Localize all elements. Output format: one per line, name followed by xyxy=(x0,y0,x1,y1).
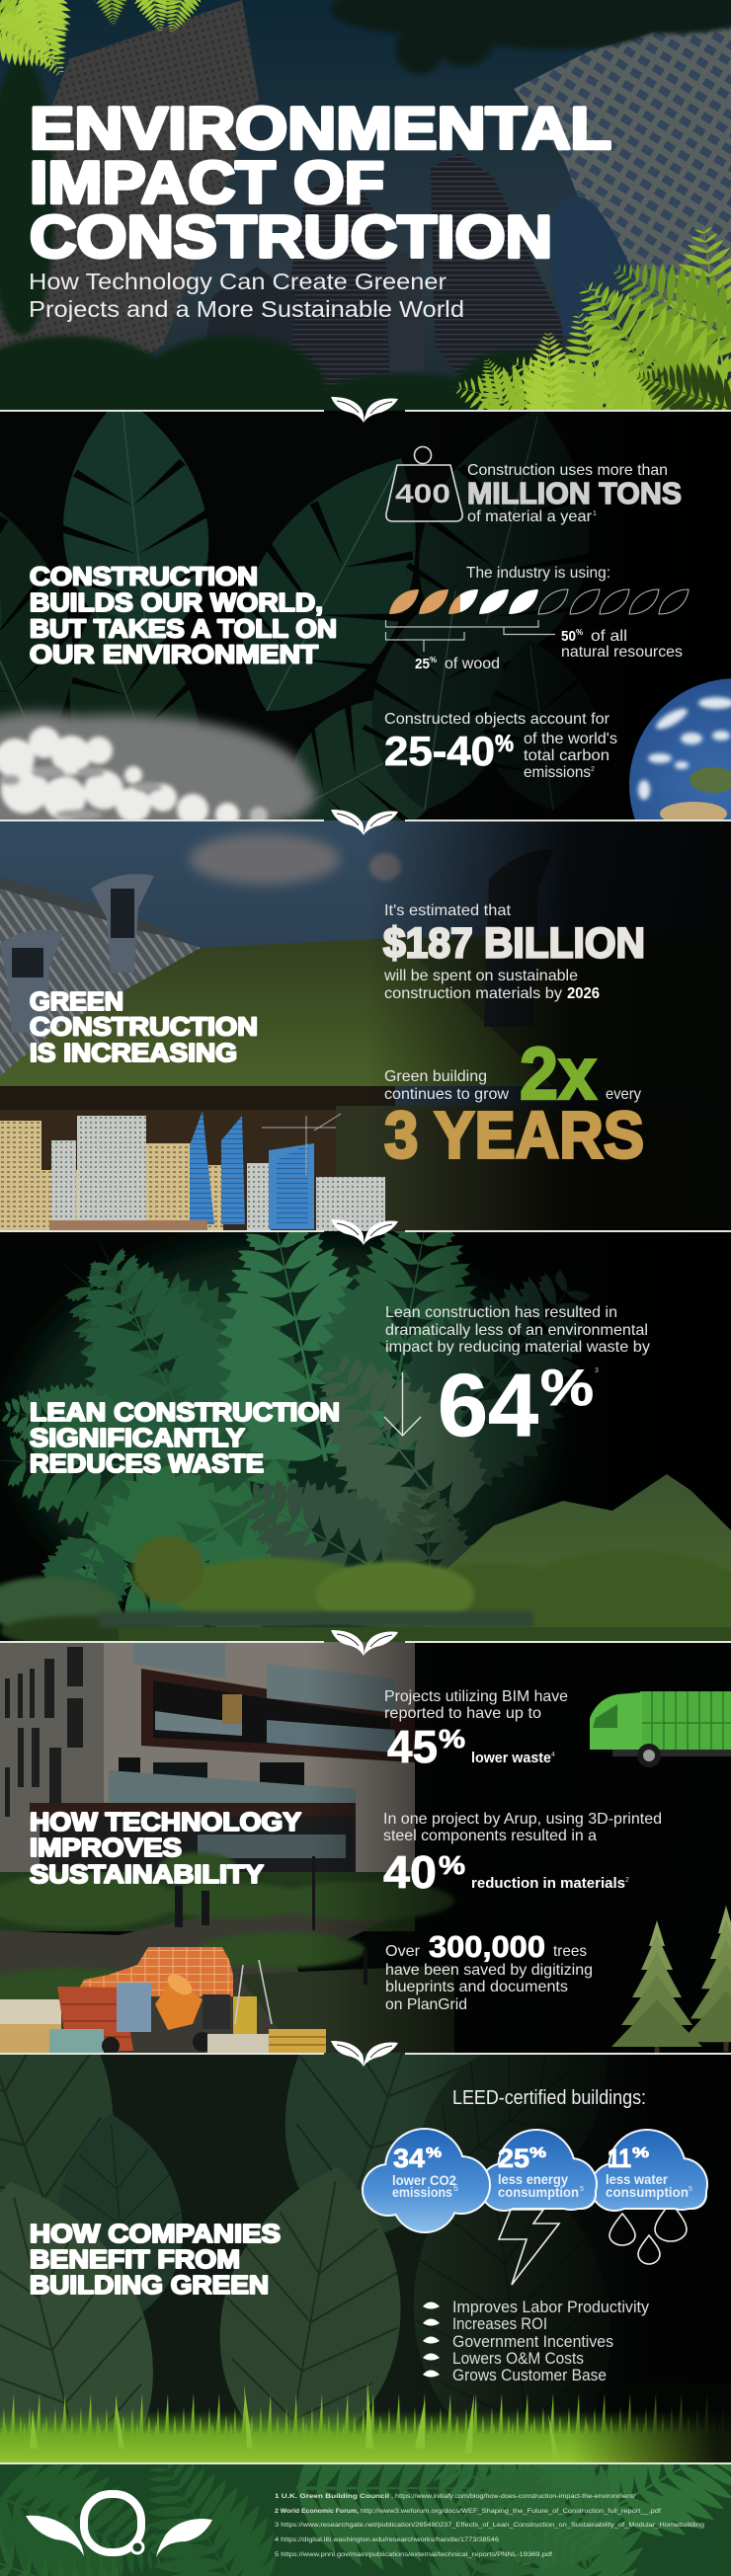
stat: BIM 45%: reported to have up to xyxy=(384,1705,541,1722)
subtitle: How Technology Can Create Greener xyxy=(29,269,447,294)
heading: IMPROVES xyxy=(30,1834,182,1862)
text: lean construction: dramatically less of an environmental xyxy=(385,1322,648,1339)
stat: 187 billion: 2026 xyxy=(567,985,600,1002)
cloud: water 11%: 5 xyxy=(689,2186,692,2193)
subtitle xyxy=(29,269,464,322)
photo: city skyline from below xyxy=(0,0,731,411)
stat: Arup 40% xyxy=(383,1813,661,1889)
stat: Arup 40%: % xyxy=(439,1850,465,1880)
skyline xyxy=(0,1111,385,1231)
heading: IS INCREASING xyxy=(30,1040,237,1067)
stat: 187 billion: It's estimated that xyxy=(384,902,512,919)
list: benefits: Increases ROI xyxy=(452,2314,547,2333)
icon: lightning xyxy=(499,2210,559,2285)
label: 50% of natural resources: % xyxy=(576,628,583,637)
heading: OUR ENVIRONMENT xyxy=(30,642,318,669)
sources xyxy=(275,2493,704,2558)
stat: 187 billion: $187 BILLION xyxy=(383,920,645,968)
pictogram: ten leaves xyxy=(389,589,689,614)
title: CONSTRUCTION xyxy=(30,203,552,271)
stat: 64% xyxy=(441,1367,599,1438)
sources: 3 https://www.researchgate.net/publication/265480237_Effects_of_Lean_Construction_on_Sustainability_of_Modular_Homebuilding xyxy=(275,2522,704,2529)
stat: 300,000 trees: on PlanGrid xyxy=(385,1996,467,2013)
heading: SUSTAINABILITY xyxy=(30,1861,264,1889)
heading: BUT TAKES A TOLL ON xyxy=(30,616,337,644)
stat: 2x every 3 years: Green building xyxy=(384,1068,487,1085)
stat: 64%: 64 xyxy=(438,1357,538,1455)
sources: , https://www.initiafy.com/blog/how-does-construction-impact-the-environment/ xyxy=(391,2493,635,2500)
icon: divider leaves xyxy=(331,397,398,2067)
cloud: CO2 34%: 34 xyxy=(393,2144,425,2173)
cloud: CO2 34%: 5 xyxy=(453,2183,458,2193)
stat: BIM 45% xyxy=(385,1690,567,1763)
cloud: CO2 34%: lower CO2 xyxy=(392,2172,456,2188)
list: benefits: Grows Customer Base xyxy=(452,2366,607,2384)
stat: BIM 45%: 45 xyxy=(387,1721,438,1772)
cloud: energy 25%: 5 xyxy=(580,2186,584,2193)
icon: fern bottom right xyxy=(450,217,731,410)
stat: carbon emissions: % xyxy=(495,731,514,757)
stat: million tons: 1 xyxy=(593,510,597,517)
stat: Arup 40%: 2 xyxy=(625,1877,629,1884)
stat: Arup 40%: steel components resulted in a xyxy=(383,1828,597,1844)
heading: CONSTRUCTION xyxy=(30,1013,258,1041)
sources: 2 World Economic Forum, xyxy=(275,2508,359,2515)
panel: header xyxy=(0,0,731,411)
heading: BENEFIT FROM xyxy=(30,2246,240,2274)
stat: 2x every 3 years: continues to grow xyxy=(384,1086,509,1103)
stat: 187 billion xyxy=(383,902,645,1002)
background: broad leaves xyxy=(0,1886,731,2522)
cloud: energy 25% xyxy=(479,2129,598,2212)
stat: carbon emissions: 2 xyxy=(591,766,595,773)
list: benefits xyxy=(423,2298,649,2384)
panel: how technology improves sustainability xyxy=(0,1642,731,2056)
list: benefits: Government Incentives xyxy=(452,2332,613,2351)
background: ferns xyxy=(0,2357,731,2576)
arrow: down xyxy=(384,1372,421,1436)
stat: 300,000 trees: Over xyxy=(385,1943,421,1960)
cloud: water 11%: 11 xyxy=(608,2144,631,2173)
stat: million tons: of material a year xyxy=(467,508,593,525)
stat: BIM 45%: % xyxy=(439,1724,465,1754)
label: 25% of wood: % xyxy=(430,656,437,664)
heading xyxy=(30,563,337,669)
cloud: CO2 34%: % xyxy=(426,2145,442,2161)
stat: 2x every 3 years: every xyxy=(606,1086,641,1103)
illustration: construction materials xyxy=(0,1947,326,2055)
heading: GREEN xyxy=(30,988,123,1016)
title: IMPACT OF xyxy=(30,150,384,215)
label: 50% of natural resources xyxy=(561,629,682,657)
sources: 4 https://digital.lib.washington.edu/researchworks/handle/1773/38546 xyxy=(275,2537,499,2543)
text: LEED: LEED-certified buildings: xyxy=(452,2087,646,2109)
stat: million tons: MILLION TONS xyxy=(467,476,682,510)
text: industry is using: The industry is using: xyxy=(466,565,610,582)
icon: pine trees xyxy=(611,1906,731,2056)
stat: carbon emissions: emissions xyxy=(524,764,591,781)
stat: 300,000 trees: 300,000 xyxy=(429,1929,545,1964)
heading: HOW TECHNOLOGY xyxy=(30,1809,301,1836)
divider: section lines xyxy=(0,410,731,2464)
panel: footer xyxy=(0,2357,731,2576)
trees xyxy=(0,0,731,444)
panel: construction builds our world xyxy=(0,412,731,820)
grass xyxy=(0,2381,731,2463)
list: benefits: Lowers O&M Costs xyxy=(452,2349,584,2368)
photo: modern apartment building xyxy=(0,1642,456,2053)
heading xyxy=(30,988,258,1067)
cloud: energy 25%: consumption xyxy=(498,2184,579,2200)
icon: water drops xyxy=(609,2202,687,2264)
stat: Arup 40%: In one project by Arup, using 3D-printed xyxy=(383,1811,662,1828)
icon: green garbage truck xyxy=(590,1691,731,1767)
stat: carbon emissions xyxy=(384,711,617,781)
label: 50% of natural resources: 50 xyxy=(561,628,576,645)
smoke clouds xyxy=(0,703,323,820)
stat: million tons: Construction uses more than xyxy=(467,462,668,479)
stat: carbon emissions: total carbon xyxy=(524,747,609,764)
panel: how companies benefit xyxy=(0,1886,731,2522)
background: monstera leaves xyxy=(0,412,591,820)
stat: carbon emissions: of the world's xyxy=(524,731,617,747)
text: lean construction: Lean construction has resulted in xyxy=(385,1304,617,1321)
stat: Arup 40%: 40 xyxy=(383,1846,437,1898)
heading: REDUCES WASTE xyxy=(30,1450,264,1478)
cloud: CO2 34% xyxy=(362,2128,491,2233)
cloud: energy 25%: less energy xyxy=(498,2171,568,2187)
cloud: energy 25%: 25 xyxy=(498,2144,529,2173)
heading: BUILDING GREEN xyxy=(30,2272,269,2300)
heading: LEAN CONSTRUCTION xyxy=(30,1399,340,1427)
stat: 300,000 trees xyxy=(385,1935,592,2009)
list: benefits: Improves Labor Productivity xyxy=(452,2298,649,2316)
cloud: CO2 34%: emissions xyxy=(392,2184,452,2200)
label: 25% of wood xyxy=(415,657,499,668)
heading xyxy=(30,1809,301,1889)
heading: SIGNIFICANTLY xyxy=(30,1425,245,1452)
cloud: water 11%: less water xyxy=(606,2171,669,2187)
stat: 2x every 3 years: 2x xyxy=(520,1032,597,1115)
photo: green roof and skyline xyxy=(0,820,731,1231)
label: 50% of natural resources: natural resources xyxy=(561,644,683,661)
heading: HOW COMPANIES xyxy=(30,2221,281,2248)
stat: carbon emissions: Constructed objects account for xyxy=(384,711,610,728)
earth xyxy=(629,678,731,820)
stat: BIM 45%: 4 xyxy=(551,1752,555,1758)
brackets xyxy=(385,620,555,652)
stat: million tons xyxy=(467,462,682,525)
background: fern fronds and mountain xyxy=(0,1231,731,1642)
stat: BIM 45%: lower waste xyxy=(471,1751,551,1766)
icon: fern top left xyxy=(0,0,202,79)
heading: BUILDS OUR WORLD, xyxy=(30,589,323,617)
stat: 2x every 3 years: 3 YEARS xyxy=(384,1098,644,1173)
panel: lean construction xyxy=(0,1231,731,1642)
title xyxy=(30,105,611,260)
text: lean construction xyxy=(385,1304,650,1356)
stat: 300,000 trees: have been saved by digitizing xyxy=(385,1962,593,1979)
heading xyxy=(30,1399,340,1478)
logo xyxy=(26,2494,212,2557)
cloud: water 11% xyxy=(590,2129,708,2212)
stat: 187 billion: construction materials by xyxy=(384,985,562,1002)
sources: 5 https://www.pnnl.gov/main/publications/external/technical_reports/PNNL-19369.pdf xyxy=(275,2551,552,2558)
icon: weight with 400 xyxy=(386,446,462,521)
title: ENVIRONMENTAL xyxy=(30,95,611,162)
stat: Arup 40%: reduction in materials xyxy=(471,1876,625,1892)
panel: green construction xyxy=(0,820,731,1231)
stat: 64%: % xyxy=(540,1360,594,1417)
subtitle: Projects and a More Sustainable World xyxy=(29,296,464,322)
cloud: water 11%: consumption xyxy=(606,2184,689,2200)
stat: 64%: 3 xyxy=(595,1367,599,1374)
label: 25% of wood: of wood xyxy=(445,656,500,672)
stat: 300,000 trees: trees xyxy=(553,1943,587,1960)
heading xyxy=(30,2221,281,2300)
sources: 1 U.K. Green Building Council xyxy=(275,2493,389,2500)
heading: CONSTRUCTION xyxy=(30,563,258,590)
stat: 300,000 trees: blueprints and documents xyxy=(385,1979,568,1995)
icon: weight with 400: 400 xyxy=(395,479,450,508)
cloud: water 11%: % xyxy=(632,2145,649,2161)
stat: BIM 45%: Projects utilizing BIM have xyxy=(384,1688,568,1705)
sources: http://www3.weforum.org/docs/WEF_Shaping_the_Future_of_Construction_full_report__.pdf xyxy=(361,2508,661,2515)
label: 50% of natural resources: of all xyxy=(591,628,627,645)
label: 25% of wood: 25 xyxy=(415,656,430,672)
cloud: energy 25%: % xyxy=(529,2145,546,2161)
stat: 187 billion: will be spent on sustainable xyxy=(383,968,578,984)
stat: carbon emissions: 25-40 xyxy=(384,728,495,774)
stat: 2x every 3 years xyxy=(383,1046,643,1159)
text: lean construction: impact by reducing material waste by xyxy=(385,1339,650,1356)
